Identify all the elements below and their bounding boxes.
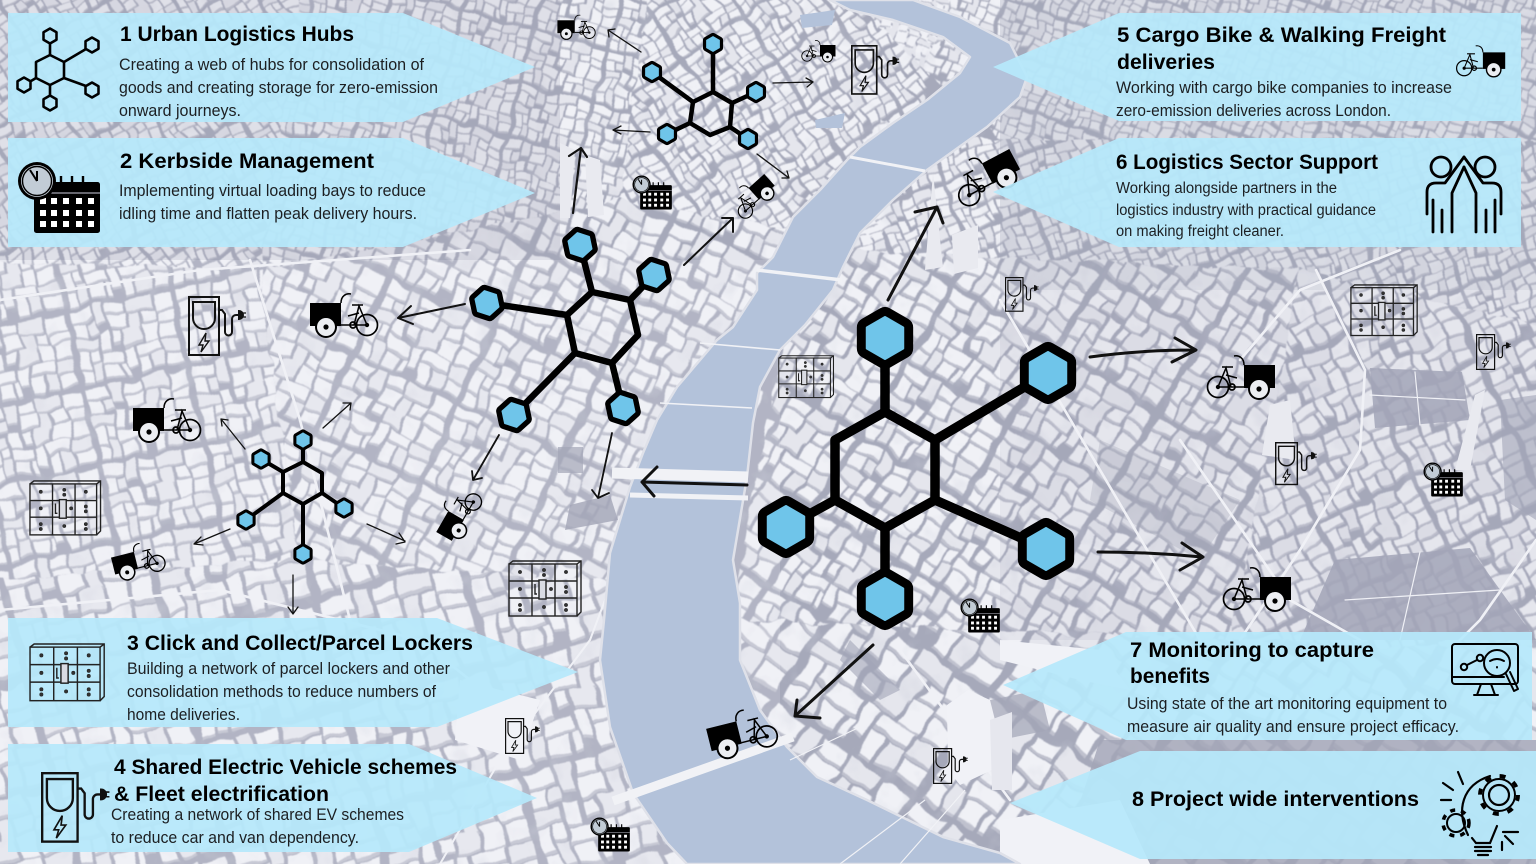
- arrow: west hub south: [288, 575, 298, 614]
- body text: [1116, 180, 1376, 240]
- panel 7: monitoring: [1003, 632, 1532, 740]
- body text: [1116, 78, 1452, 120]
- icon: charger: [42, 773, 109, 842]
- panel 1: urban logistics hubs: [8, 13, 535, 122]
- arrow: west hub north-west: [221, 419, 245, 449]
- panel 5: cargo bike and walking freight: [993, 13, 1521, 121]
- body text: to reduce car and van dependency.: [111, 828, 359, 847]
- icon: cargo bike: [704, 704, 780, 762]
- arrow: large hub south: [795, 645, 873, 718]
- bridges over river: [612, 157, 965, 864]
- arrow: north hub south-east: [757, 154, 789, 178]
- white large buildings: [455, 640, 1150, 864]
- heading: 8 Project wide interventions: [1132, 788, 1419, 811]
- arrow: west hub south-east: [367, 524, 405, 544]
- arrow: west hub south-west: [194, 529, 230, 545]
- icon: cargo bike: [726, 169, 780, 222]
- icon: calendar and clock: [632, 175, 672, 210]
- icon: high five: [1427, 157, 1501, 232]
- body text: [119, 181, 426, 223]
- body text: Creating a web of hubs for consolidation of: [119, 55, 424, 74]
- arrow: north hub west: [613, 126, 650, 134]
- landmark tall buildings: [560, 143, 1485, 470]
- icon: charger: [506, 719, 540, 753]
- icon: cargo bike: [557, 15, 595, 39]
- body text: [111, 805, 404, 847]
- arrow: north hub east: [773, 78, 813, 87]
- icon: calendar and clock: [1423, 462, 1463, 497]
- lighter west bank wash: [0, 260, 780, 864]
- body text: logistics industry with practical guidance: [1116, 202, 1376, 219]
- heading: & Fleet electrification: [114, 783, 329, 806]
- hub network: small north: [646, 36, 762, 146]
- body text: goods and creating storage for zero-emission: [119, 78, 438, 97]
- arrow: large hub east lower: [1098, 543, 1203, 570]
- hub network: small west: [240, 433, 350, 561]
- icon: cargo bike: [1224, 568, 1291, 611]
- icon: cargo bike: [310, 294, 378, 337]
- arrow: large hub east upper: [1090, 338, 1196, 362]
- icon: gears and lightbulb: [1441, 772, 1518, 855]
- icon: parcel locker: [30, 644, 104, 701]
- icon: calendar and clock: [960, 598, 1000, 633]
- heading: deliveries: [1117, 51, 1215, 74]
- arrow: medium hub north: [569, 148, 587, 213]
- icon: charger: [1477, 335, 1511, 369]
- arrow: medium hub south-west: [472, 435, 499, 480]
- icon: cargo bike: [802, 40, 836, 62]
- heading: [1117, 24, 1446, 74]
- icon: cargo bike: [1457, 46, 1505, 77]
- body text: zero-emission deliveries across London.: [1116, 101, 1391, 120]
- body text: [119, 55, 438, 120]
- body text: [1127, 694, 1459, 736]
- heading: 1 Urban Logistics Hubs: [120, 23, 354, 46]
- icon: cargo bike: [133, 399, 200, 442]
- icon: charger: [1006, 278, 1039, 311]
- body text: Implementing virtual loading bays to reduce: [119, 181, 426, 200]
- panel 3: click and collect: [8, 618, 578, 727]
- panel 2: kerbside management: [8, 138, 535, 247]
- panel 6: logistics sector support: [993, 138, 1521, 247]
- icon: parcel locker: [1351, 285, 1417, 336]
- heading: [114, 756, 457, 806]
- icon: charger: [852, 46, 899, 94]
- icon: monitor with magnifier: [1452, 644, 1518, 695]
- heading: 5 Cargo Bike & Walking Freight: [1117, 24, 1446, 47]
- body text: idling time and flatten peak delivery hours.: [119, 204, 417, 223]
- icon: parcel locker: [30, 481, 101, 535]
- icon: cargo bike: [430, 483, 486, 545]
- heading: 7 Monitoring to capture: [1130, 639, 1374, 662]
- body text: Working alongside partners in the: [1116, 180, 1337, 197]
- panel 4: shared electric vehicles: [8, 744, 537, 852]
- heading: benefits: [1130, 665, 1210, 688]
- body text: Using state of the art monitoring equipment to: [1127, 694, 1447, 713]
- icon: charger: [189, 297, 246, 355]
- heading: 6 Logistics Sector Support: [1116, 151, 1378, 174]
- icon: cargo bike: [1208, 356, 1275, 399]
- body text: Working with cargo bike companies to increase: [1116, 78, 1452, 97]
- heading: 4 Shared Electric Vehicle schemes: [114, 756, 457, 779]
- panel 8: project wide interventions: [1010, 751, 1536, 859]
- body text: consolidation methods to reduce numbers of: [127, 682, 436, 701]
- river thames: [600, 0, 1027, 864]
- hub network: medium: [474, 231, 667, 429]
- arrow: large hub north: [888, 207, 943, 300]
- body text: home deliveries.: [127, 705, 240, 724]
- body text: [127, 659, 450, 724]
- body text: Creating a network of shared EV schemes: [111, 805, 404, 824]
- arrow: medium hub west: [398, 304, 465, 324]
- icon: calendar and clock: [590, 817, 630, 852]
- heading: 3 Click and Collect/Parcel Lockers: [127, 632, 473, 655]
- body text: on making freight cleaner.: [1116, 223, 1284, 240]
- body text: measure air quality and ensure project efficacy.: [1127, 717, 1459, 736]
- arrows from hubs to interventions: [194, 29, 1203, 718]
- arrow: north hub north-west: [608, 29, 641, 52]
- arrow: large hub west: [642, 467, 747, 496]
- arrow: west hub north-east: [323, 403, 351, 428]
- icon: calendar and clock: [18, 162, 100, 233]
- icon: parcel locker: [779, 356, 833, 398]
- icon: parcel locker: [509, 561, 581, 616]
- heading: [1130, 639, 1374, 688]
- body text: onward journeys.: [119, 101, 241, 120]
- light roads: [0, 250, 1536, 864]
- arrow: medium hub south: [592, 433, 612, 498]
- body text: Building a network of parcel lockers and other: [127, 659, 450, 678]
- icon: hub network: [18, 28, 98, 110]
- hub network: large: [768, 317, 1066, 620]
- icon: cargo bike: [945, 141, 1025, 211]
- heading: 2 Kerbside Management: [120, 150, 374, 173]
- icon: cargo bike: [109, 538, 167, 583]
- icon: charger: [1276, 443, 1317, 484]
- icon: charger: [934, 749, 968, 783]
- arrow: medium hub north-east: [684, 218, 733, 265]
